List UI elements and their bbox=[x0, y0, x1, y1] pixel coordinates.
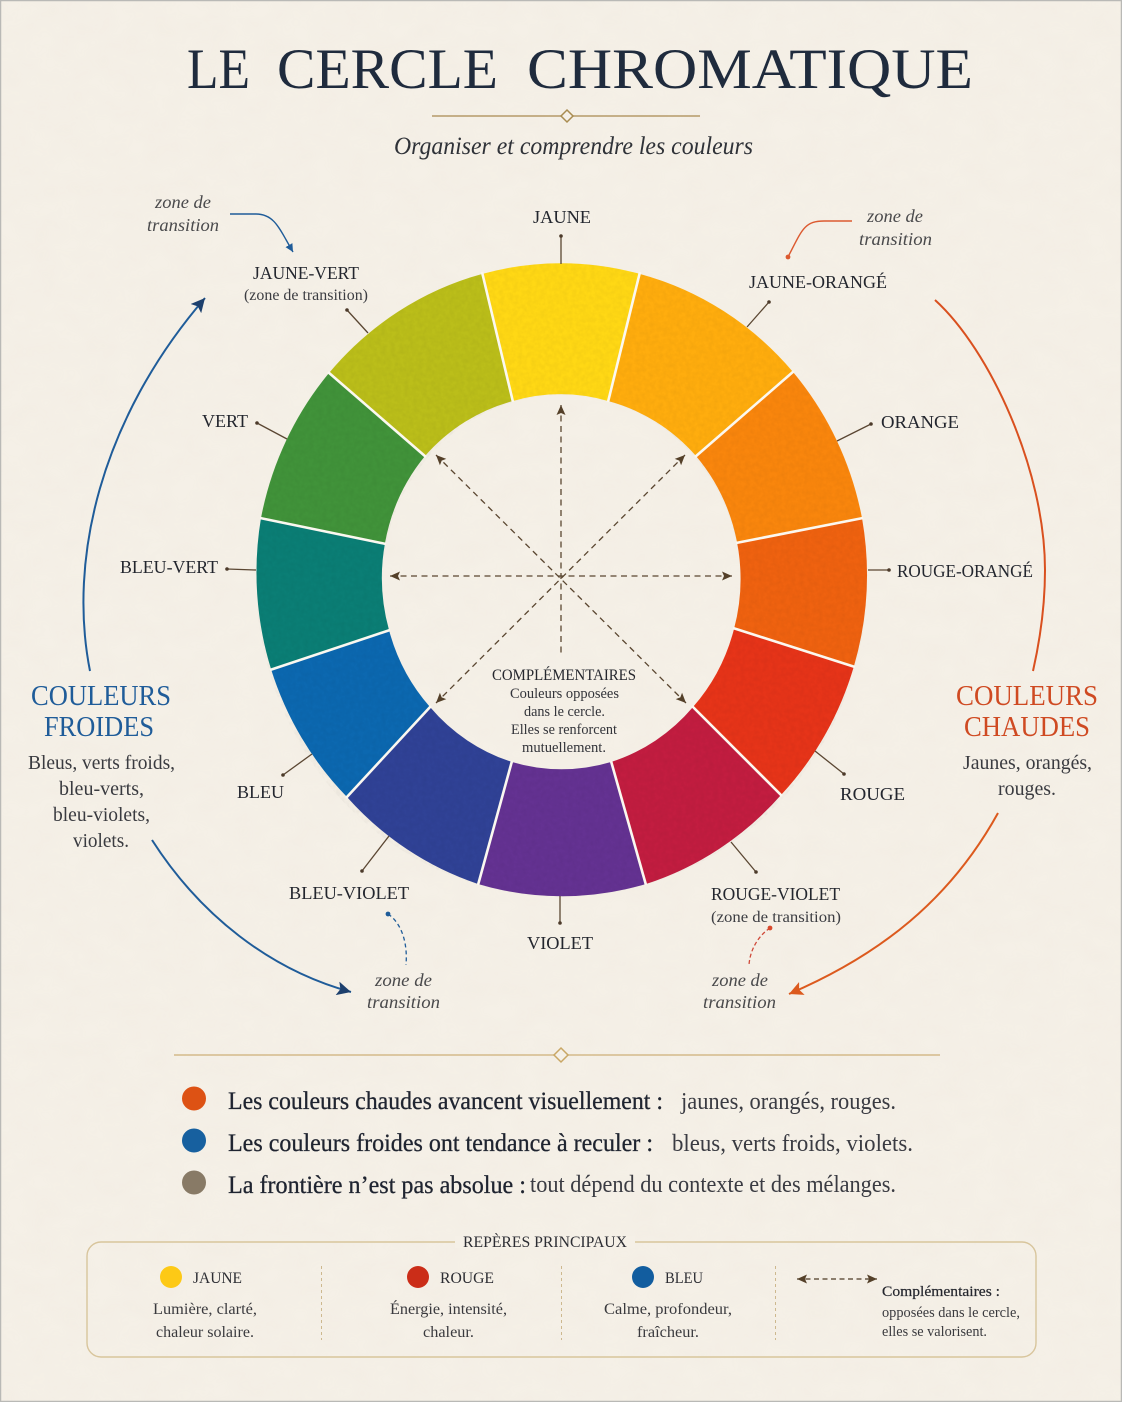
legend: jaune: Lumière, clarté, bbox=[153, 1301, 257, 1318]
panel: couleurs froides: bleu-verts, bbox=[59, 778, 144, 800]
annotation: zone de transition, bottom right bbox=[703, 926, 776, 1012]
legend: rouge: chaleur. bbox=[423, 1324, 474, 1341]
centre note: complémentaires: Couleurs opposées bbox=[510, 686, 619, 702]
legend: bleu: BLEU bbox=[665, 1270, 703, 1287]
legend: complémentaires: elles se valorisent. bbox=[882, 1324, 987, 1340]
annotation: zone de transition, top right: zone de bbox=[866, 206, 923, 226]
annotation: zone de transition, top left: zone de bbox=[154, 192, 211, 212]
panel heading: REPÈRES PRINCIPAUX bbox=[463, 1232, 627, 1251]
annotation: zone de transition, top left: transition bbox=[147, 215, 219, 235]
annotation: zone de transition, bottom right: transition bbox=[703, 992, 776, 1012]
title: CHROMATIQUE bbox=[527, 38, 973, 101]
segment: violet bbox=[478, 762, 646, 896]
statement: couleurs chaudes: jaunes, orangés, rouges. bbox=[680, 1089, 896, 1115]
segment: jaune-vert bbox=[329, 274, 513, 456]
panel: couleurs chaudes: COULEURS bbox=[956, 680, 1098, 712]
label: rouge-violet: (zone de transition) bbox=[711, 909, 841, 926]
segment: bleu bbox=[271, 630, 430, 797]
segment: rouge-orangé bbox=[734, 518, 867, 666]
panel: couleurs froides: violets. bbox=[73, 830, 129, 852]
label: violet bbox=[527, 896, 593, 953]
statement: frontière: La frontière n’est pas absolue : bbox=[228, 1172, 526, 1199]
arrow: warm arc lower bbox=[789, 813, 998, 994]
centre note: complémentaires: dans le cercle. bbox=[524, 704, 605, 720]
annotation: zone de transition, bottom left: transition bbox=[367, 992, 440, 1012]
label: bleu-violet bbox=[289, 836, 409, 903]
title bbox=[187, 38, 973, 101]
statement: couleurs chaudes bbox=[182, 1086, 896, 1115]
panel: couleurs chaudes bbox=[956, 680, 1098, 800]
panel: couleurs froides: Bleus, verts froids, bbox=[28, 752, 175, 774]
panel: couleurs chaudes: CHAUDES bbox=[964, 711, 1090, 743]
label: bleu-vert: BLEU-VERT bbox=[120, 557, 218, 577]
subtitle: Organiser et comprendre les couleurs bbox=[394, 133, 753, 160]
panel: couleurs chaudes: rouges. bbox=[998, 778, 1056, 800]
legend: complémentaires bbox=[797, 1279, 1020, 1340]
statement: couleurs froides: Les couleurs froides ont tendance à reculer : bbox=[228, 1130, 653, 1157]
legend: rouge bbox=[390, 1266, 507, 1341]
panel: repères principaux bbox=[87, 1232, 1036, 1357]
label: jaune-orangé bbox=[747, 271, 887, 327]
label: rouge: ROUGE bbox=[840, 784, 905, 804]
complementary arrows bbox=[390, 405, 732, 703]
label: bleu: BLEU bbox=[237, 782, 284, 802]
legend: bleu bbox=[604, 1266, 732, 1341]
segment: bleu-vert bbox=[256, 518, 389, 669]
label: rouge bbox=[815, 751, 905, 804]
legend: jaune bbox=[153, 1266, 257, 1341]
label: jaune bbox=[533, 207, 591, 264]
segment: bleu-violet bbox=[347, 707, 512, 884]
legend: complémentaires: Complémentaires : bbox=[882, 1284, 1000, 1300]
label: vert bbox=[202, 411, 287, 439]
statement: couleurs froides: bleus, verts froids, violets. bbox=[672, 1131, 913, 1157]
panel: couleurs chaudes: Jaunes, orangés, bbox=[963, 752, 1092, 774]
label: jaune-vert: (zone de transition) bbox=[244, 287, 368, 304]
statement: couleurs froides bbox=[182, 1128, 913, 1157]
panel: couleurs froides: bleu-violets, bbox=[53, 804, 150, 826]
title divider bbox=[432, 110, 700, 122]
arrow: cold arc down bbox=[152, 840, 351, 992]
label: rouge-violet: ROUGE-VIOLET bbox=[711, 884, 840, 904]
label: jaune-vert: JAUNE-VERT bbox=[253, 263, 359, 283]
panel: couleurs froides: COULEURS bbox=[31, 680, 171, 712]
segment: orange bbox=[696, 372, 862, 542]
statement: frontière: tout dépend du contexte et des mélanges. bbox=[530, 1172, 896, 1198]
annotation: zone de transition, top right bbox=[786, 206, 932, 259]
panel: couleurs froides: FROIDES bbox=[44, 711, 154, 743]
label: jaune: JAUNE bbox=[533, 207, 591, 227]
label: vert: VERT bbox=[202, 411, 248, 431]
annotation: zone de transition, bottom right: zone de bbox=[711, 970, 768, 990]
statement: couleurs chaudes: Les couleurs chaudes avancent visuellement : bbox=[228, 1088, 663, 1115]
annotation: zone de transition, top right: transition bbox=[859, 229, 932, 249]
legend: bleu: fraîcheur. bbox=[637, 1324, 699, 1341]
arrow: warm arc upper bbox=[935, 300, 1045, 671]
annotation: zone de transition, top left bbox=[147, 192, 293, 252]
annotation: zone de transition, bottom left: zone de bbox=[374, 970, 432, 990]
label: jaune-vert bbox=[244, 263, 368, 333]
legend: rouge: Énergie, intensité, bbox=[390, 1301, 507, 1318]
section divider bbox=[174, 1048, 940, 1062]
legend: jaune: chaleur solaire. bbox=[156, 1324, 254, 1341]
legend: jaune: JAUNE bbox=[193, 1270, 242, 1287]
arrow: cold arc up bbox=[83, 298, 205, 671]
centre note: complémentaires: Elles se renforcent bbox=[511, 722, 618, 738]
segment: vert bbox=[261, 373, 425, 543]
centre note: complémentaires: mutuellement. bbox=[522, 740, 606, 756]
title: CERCLE bbox=[277, 38, 498, 101]
title: LE bbox=[187, 38, 250, 101]
panel: couleurs froides bbox=[28, 680, 175, 852]
segment: rouge bbox=[693, 629, 854, 795]
segment: rouge-violet bbox=[611, 707, 781, 884]
label: bleu-violet: BLEU-VIOLET bbox=[289, 883, 409, 903]
centre note: complémentaires: COMPLÉMENTAIRES bbox=[492, 665, 636, 684]
legend: rouge: ROUGE bbox=[440, 1270, 494, 1287]
label: orange: ORANGE bbox=[881, 412, 959, 432]
statement: frontière bbox=[182, 1170, 896, 1199]
legend: complémentaires: opposées dans le cercle, bbox=[882, 1305, 1020, 1321]
centre note: complémentaires bbox=[492, 665, 636, 756]
label: orange bbox=[837, 412, 959, 441]
colour wheel bbox=[256, 263, 867, 897]
label: rouge-orangé: ROUGE-ORANGÉ bbox=[897, 560, 1033, 581]
label: jaune-orangé: JAUNE-ORANGÉ bbox=[749, 271, 887, 292]
segment: jaune-orangé bbox=[608, 274, 793, 456]
label: violet: VIOLET bbox=[527, 933, 593, 953]
segment: jaune bbox=[482, 263, 640, 401]
label: bleu bbox=[237, 754, 312, 802]
annotation: zone de transition, bottom left bbox=[367, 912, 440, 1012]
legend: bleu: Calme, profondeur, bbox=[604, 1301, 732, 1318]
label: rouge-violet bbox=[711, 842, 841, 926]
